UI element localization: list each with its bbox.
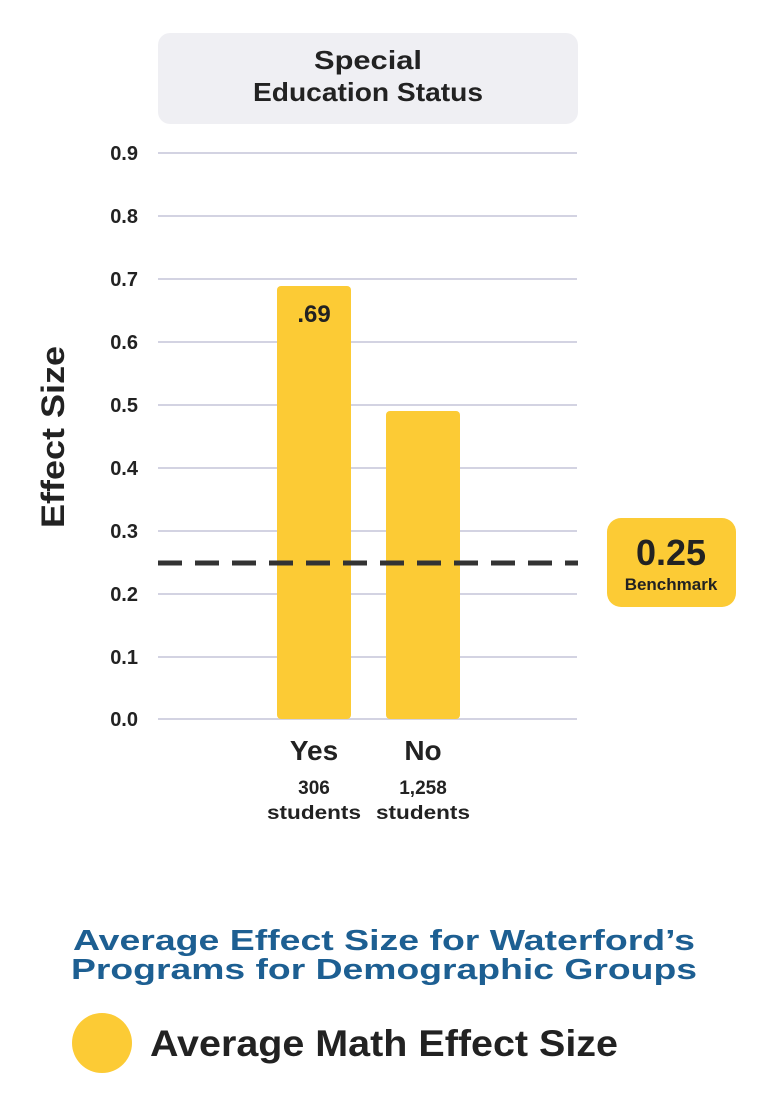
benchmark callout (607, 518, 736, 607)
benchmark callout: Benchmark (625, 575, 718, 594)
header: Special Education Status: Education Status (253, 77, 483, 107)
category label: Yes (267, 735, 361, 824)
y-axis gridlines and labels: 0.1 (110, 647, 138, 669)
y-axis gridlines and labels: 0.3 (110, 521, 138, 543)
benchmark callout: 0.25 (636, 532, 706, 573)
y-axis gridlines and labels: 0.2 (110, 584, 138, 606)
legend: Average Math Effect Size (150, 1023, 618, 1064)
y-axis gridlines and labels: 0.0 (110, 709, 138, 731)
header: Special Education Status (158, 33, 578, 124)
y-axis gridlines and labels: 0.6 (110, 332, 138, 354)
y-axis gridlines and labels: 0.5 (110, 395, 138, 417)
category label: No (376, 735, 470, 824)
y-axis gridlines and labels: 0.4 (110, 458, 139, 480)
y-axis gridlines and labels: 0.7 (110, 269, 138, 291)
category label: No: 1,258 (399, 778, 447, 799)
y-axis title: Effect Size (35, 346, 71, 528)
category label: Yes: 306 (298, 778, 330, 799)
chart title: Average Effect Size for Waterford’s (73, 925, 695, 957)
bar: Yes (277, 286, 351, 719)
benchmark dashed line (158, 560, 578, 566)
legend (72, 1013, 618, 1073)
category label: No: students (376, 803, 470, 824)
chart title: Programs for Demographic Groups (71, 954, 697, 986)
category label: Yes: students (267, 803, 361, 824)
category label: Yes: Yes (290, 735, 338, 766)
y-axis gridlines and labels: 0.8 (110, 206, 138, 228)
bar: Yes: .69 (297, 301, 331, 328)
y-axis gridlines and labels (110, 143, 577, 731)
bar: No (386, 411, 460, 719)
category label: No: No (404, 735, 442, 766)
y-axis gridlines and labels: 0.9 (110, 143, 138, 165)
header: Special Education Status: Special (314, 45, 422, 75)
chart title (71, 925, 697, 986)
